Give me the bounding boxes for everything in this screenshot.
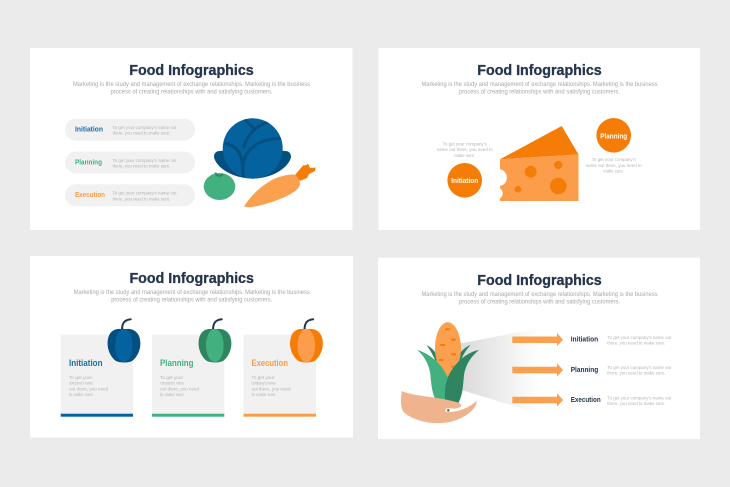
row: execution xyxy=(571,395,672,407)
subtitle: Marketing is the study and management of exchange relationships. Marketing is the business xyxy=(422,81,658,88)
panel: cheese xyxy=(378,48,700,230)
row: initiation: To get your company's name out xyxy=(607,335,672,341)
title: Food Infographics xyxy=(129,63,254,79)
panel: pepper cards xyxy=(30,256,353,438)
subtitle: Marketing is the study and management of exchange relationships. Marketing is the business xyxy=(422,291,658,298)
text: initiation description: make sure. xyxy=(454,153,475,159)
card: initiation: out there, you need xyxy=(69,386,108,392)
subtitle xyxy=(422,291,658,306)
subtitle xyxy=(73,81,310,96)
text: planning description: name out there, you need to xyxy=(586,163,642,169)
circle: initiation: Initiation xyxy=(451,178,478,185)
text: planning description: To get your company's xyxy=(592,157,636,163)
row: planning xyxy=(571,365,672,377)
row: execution: To get your company's name out xyxy=(607,395,672,401)
panel: pills with vegetables xyxy=(30,48,352,230)
icon: carrot xyxy=(244,164,316,207)
card: initiation xyxy=(61,335,133,417)
icon: orange pepper xyxy=(290,319,323,362)
pill: planning: To get your company's name out xyxy=(112,158,177,164)
pill: initiation: To get your company's name out xyxy=(112,125,177,131)
subtitle: process of creating relationships with and satisfying customers. xyxy=(111,296,272,304)
icon: corn in hand xyxy=(401,322,479,423)
row: initiation: Initiation xyxy=(571,336,598,344)
circle: initiation xyxy=(447,163,482,198)
card: execution: to make sure. xyxy=(252,392,276,398)
row: initiation xyxy=(571,335,672,347)
arrow: initiation xyxy=(512,333,563,346)
text: planning description: make sure. xyxy=(603,169,624,175)
row: planning: there, you need to make sure. xyxy=(607,371,665,377)
subtitle: Marketing is the study and management of exchange relationships. Marketing is the business xyxy=(73,81,310,88)
pill: execution xyxy=(65,184,195,206)
icon: cabbage xyxy=(214,118,291,179)
pill: planning xyxy=(65,152,195,174)
text: initiation description xyxy=(437,142,493,159)
icon: green pepper xyxy=(199,319,231,362)
row: execution: Execution xyxy=(571,397,601,404)
circle: planning xyxy=(596,118,631,153)
card: initiation: To get your xyxy=(69,375,92,381)
subtitle xyxy=(74,289,310,304)
pill: planning: Planning xyxy=(75,160,102,166)
arrow: planning xyxy=(512,363,563,377)
pill: initiation: Initiation xyxy=(75,126,103,134)
row: execution: there, you need to make sure. xyxy=(607,401,665,407)
title: Food Infographics xyxy=(129,271,254,287)
card: planning: Planning xyxy=(160,358,194,368)
card: execution: Execution xyxy=(252,358,288,368)
pill: initiation xyxy=(65,119,195,141)
text: initiation description: name out there, you need to xyxy=(437,147,493,153)
icon: cheese wedge xyxy=(500,126,578,201)
row: initiation: there, you need to make sure. xyxy=(607,341,665,347)
subtitle: process of creating relationships with and satisfying customers. xyxy=(459,298,620,306)
row: planning: Planning xyxy=(571,367,598,374)
card: execution: To get your xyxy=(252,375,275,381)
card: execution: company's name xyxy=(252,381,276,387)
card: planning: To get your xyxy=(160,375,183,381)
card: initiation: company's name xyxy=(69,381,93,387)
text: initiation description: To get your company's xyxy=(443,142,487,148)
card: planning: company's name xyxy=(160,381,184,387)
subtitle: process of creating relationships with and satisfying customers. xyxy=(110,88,273,96)
card: planning xyxy=(152,335,224,417)
row: planning: To get your company's name out xyxy=(607,365,672,371)
pill: planning: there, you need to make sure. xyxy=(112,164,170,170)
circle: planning: Planning xyxy=(600,133,627,140)
pill: execution: To get your company's name out xyxy=(112,191,177,197)
title: Food Infographics xyxy=(477,63,602,79)
card: planning: out there, you need xyxy=(160,386,199,392)
card: planning: to make sure. xyxy=(160,392,185,398)
subtitle: process of creating relationships with and satisfying customers. xyxy=(459,88,620,96)
card: initiation: Initiation xyxy=(69,358,102,368)
pill: execution: there, you need to make sure. xyxy=(112,196,170,202)
card: initiation: to make sure. xyxy=(69,392,94,398)
pill: initiation: there, you need to make sure. xyxy=(112,131,170,137)
arrow: execution xyxy=(512,393,563,407)
panel: corn and arrows xyxy=(378,258,700,439)
text: planning description xyxy=(586,157,642,175)
subtitle xyxy=(422,81,658,96)
card: execution: out there, you need xyxy=(252,386,291,392)
card: execution xyxy=(244,335,316,417)
subtitle: Marketing is the study and management of exchange relationships. Marketing is the business xyxy=(74,289,310,296)
pill: execution: Execution xyxy=(75,192,105,199)
title: Food Infographics xyxy=(477,273,602,289)
icon: blue pepper xyxy=(108,319,140,362)
icon: tomato xyxy=(204,172,235,200)
gradient beam xyxy=(458,328,540,414)
